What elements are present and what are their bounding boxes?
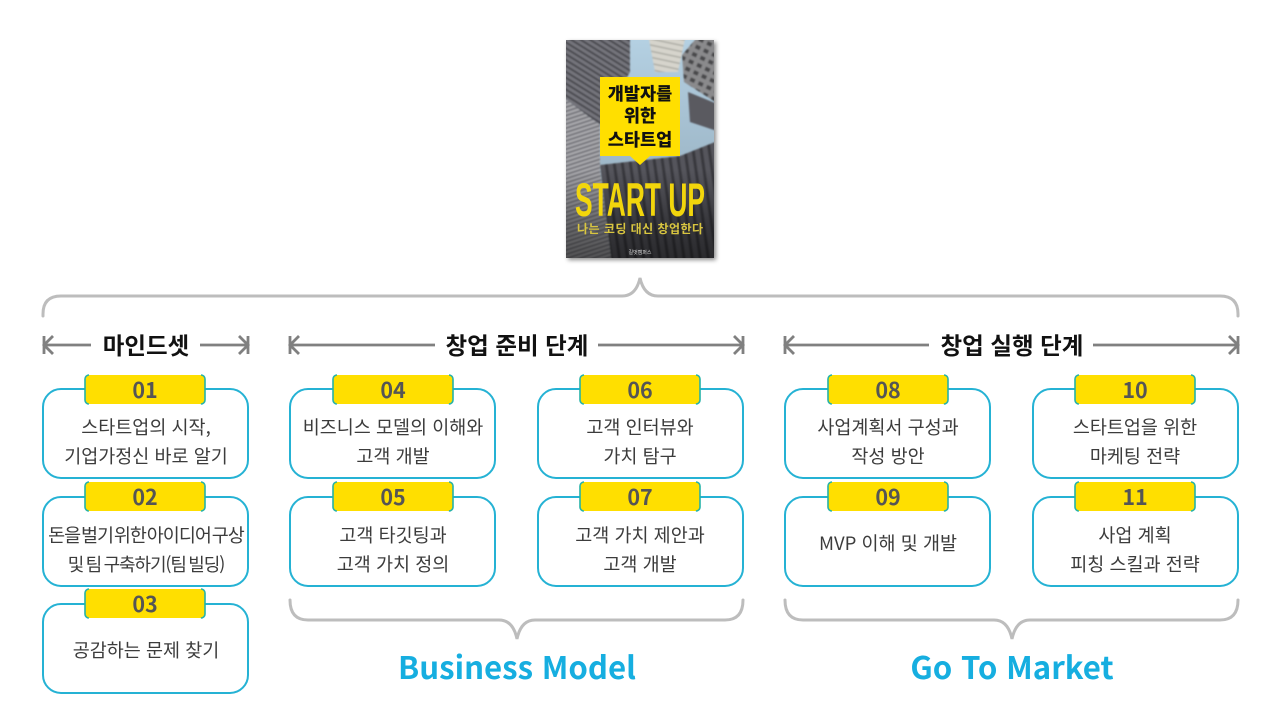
card 06: 가치 탐구 bbox=[603, 443, 677, 469]
card 06 bbox=[538, 374, 743, 478]
card 05: 고객 타깃팅과 bbox=[339, 522, 447, 548]
card 07: 고객 가치 제안과 bbox=[575, 522, 705, 548]
card 05: 고객 가치 정의 bbox=[337, 551, 449, 577]
section header: preparation: 창업 준비 단계 bbox=[446, 327, 588, 361]
card 08 bbox=[785, 374, 990, 478]
book label: yellow title box bbox=[600, 77, 680, 165]
card 01 bbox=[43, 374, 248, 478]
card 08: 사업계획서 구성과 bbox=[817, 414, 959, 440]
card 02: 및 팀 구축하기(팀 빌딩) bbox=[68, 551, 224, 577]
card 07: 07 bbox=[627, 481, 653, 512]
book label: yellow title box: 위한 bbox=[624, 103, 656, 128]
book publisher: 길벗캠퍼스 bbox=[628, 249, 652, 256]
card 09: MVP 이해 및 개발 bbox=[819, 530, 957, 556]
book label: yellow title box: 개발자를 bbox=[608, 81, 672, 106]
section header: execution: 창업 실행 단계 bbox=[941, 327, 1083, 361]
card 07: 고객 개발 bbox=[603, 551, 677, 577]
card 03 bbox=[43, 588, 248, 693]
book label: yellow title box: 스타트업 bbox=[608, 127, 672, 152]
card 04: 04 bbox=[380, 374, 406, 405]
card 04: 비즈니스 모델의 이해와 bbox=[303, 414, 483, 440]
card 10 bbox=[1033, 374, 1238, 478]
section header: mindset bbox=[44, 327, 248, 361]
card 06: 06 bbox=[627, 374, 653, 405]
card 09 bbox=[785, 481, 990, 586]
section header: preparation bbox=[290, 327, 743, 361]
card 06: 고객 인터뷰와 bbox=[586, 414, 694, 440]
card 02 bbox=[43, 481, 248, 586]
section header: execution bbox=[785, 327, 1238, 361]
card 04 bbox=[290, 374, 495, 478]
brace: go to market bbox=[785, 600, 1238, 639]
card 11: 사업 계획 bbox=[1098, 522, 1172, 548]
card 10: 10 bbox=[1122, 374, 1148, 405]
label: Go To Market: Go To Market bbox=[910, 643, 1114, 688]
book headline: START UP bbox=[575, 173, 705, 226]
brace: business model bbox=[290, 600, 743, 639]
card 05 bbox=[290, 481, 495, 586]
card 03: 03 bbox=[132, 588, 158, 619]
card 04: 고객 개발 bbox=[356, 443, 430, 469]
card 02: 02 bbox=[132, 481, 158, 512]
card 08: 08 bbox=[875, 374, 901, 405]
card 10: 스타트업을 위한 bbox=[1073, 414, 1197, 440]
book subtitle: 나는 코딩 대신 창업한다 bbox=[577, 220, 703, 237]
card 01: 스타트업의 시작, bbox=[81, 414, 211, 440]
card 11 bbox=[1033, 481, 1238, 586]
card 07 bbox=[538, 481, 743, 586]
label: Business Model: Business Model bbox=[398, 643, 636, 688]
top brace bbox=[43, 278, 1238, 316]
card 02: 돈을 벌기 위한 아이디어 구상 bbox=[48, 522, 245, 548]
card 08: 작성 방안 bbox=[851, 443, 925, 469]
book cover bbox=[560, 34, 720, 264]
card 01: 01 bbox=[132, 374, 158, 405]
card 01: 기업가정신 바로 알기 bbox=[64, 443, 228, 469]
section header: mindset: 마인드셋 bbox=[103, 327, 189, 361]
card 09: 09 bbox=[875, 481, 901, 512]
card 03: 공감하는 문제 찾기 bbox=[73, 637, 219, 663]
card 11: 피칭 스킬과 전략 bbox=[1070, 551, 1200, 577]
card 10: 마케팅 전략 bbox=[1090, 443, 1180, 469]
card 11: 11 bbox=[1122, 481, 1148, 512]
card 05: 05 bbox=[380, 481, 406, 512]
